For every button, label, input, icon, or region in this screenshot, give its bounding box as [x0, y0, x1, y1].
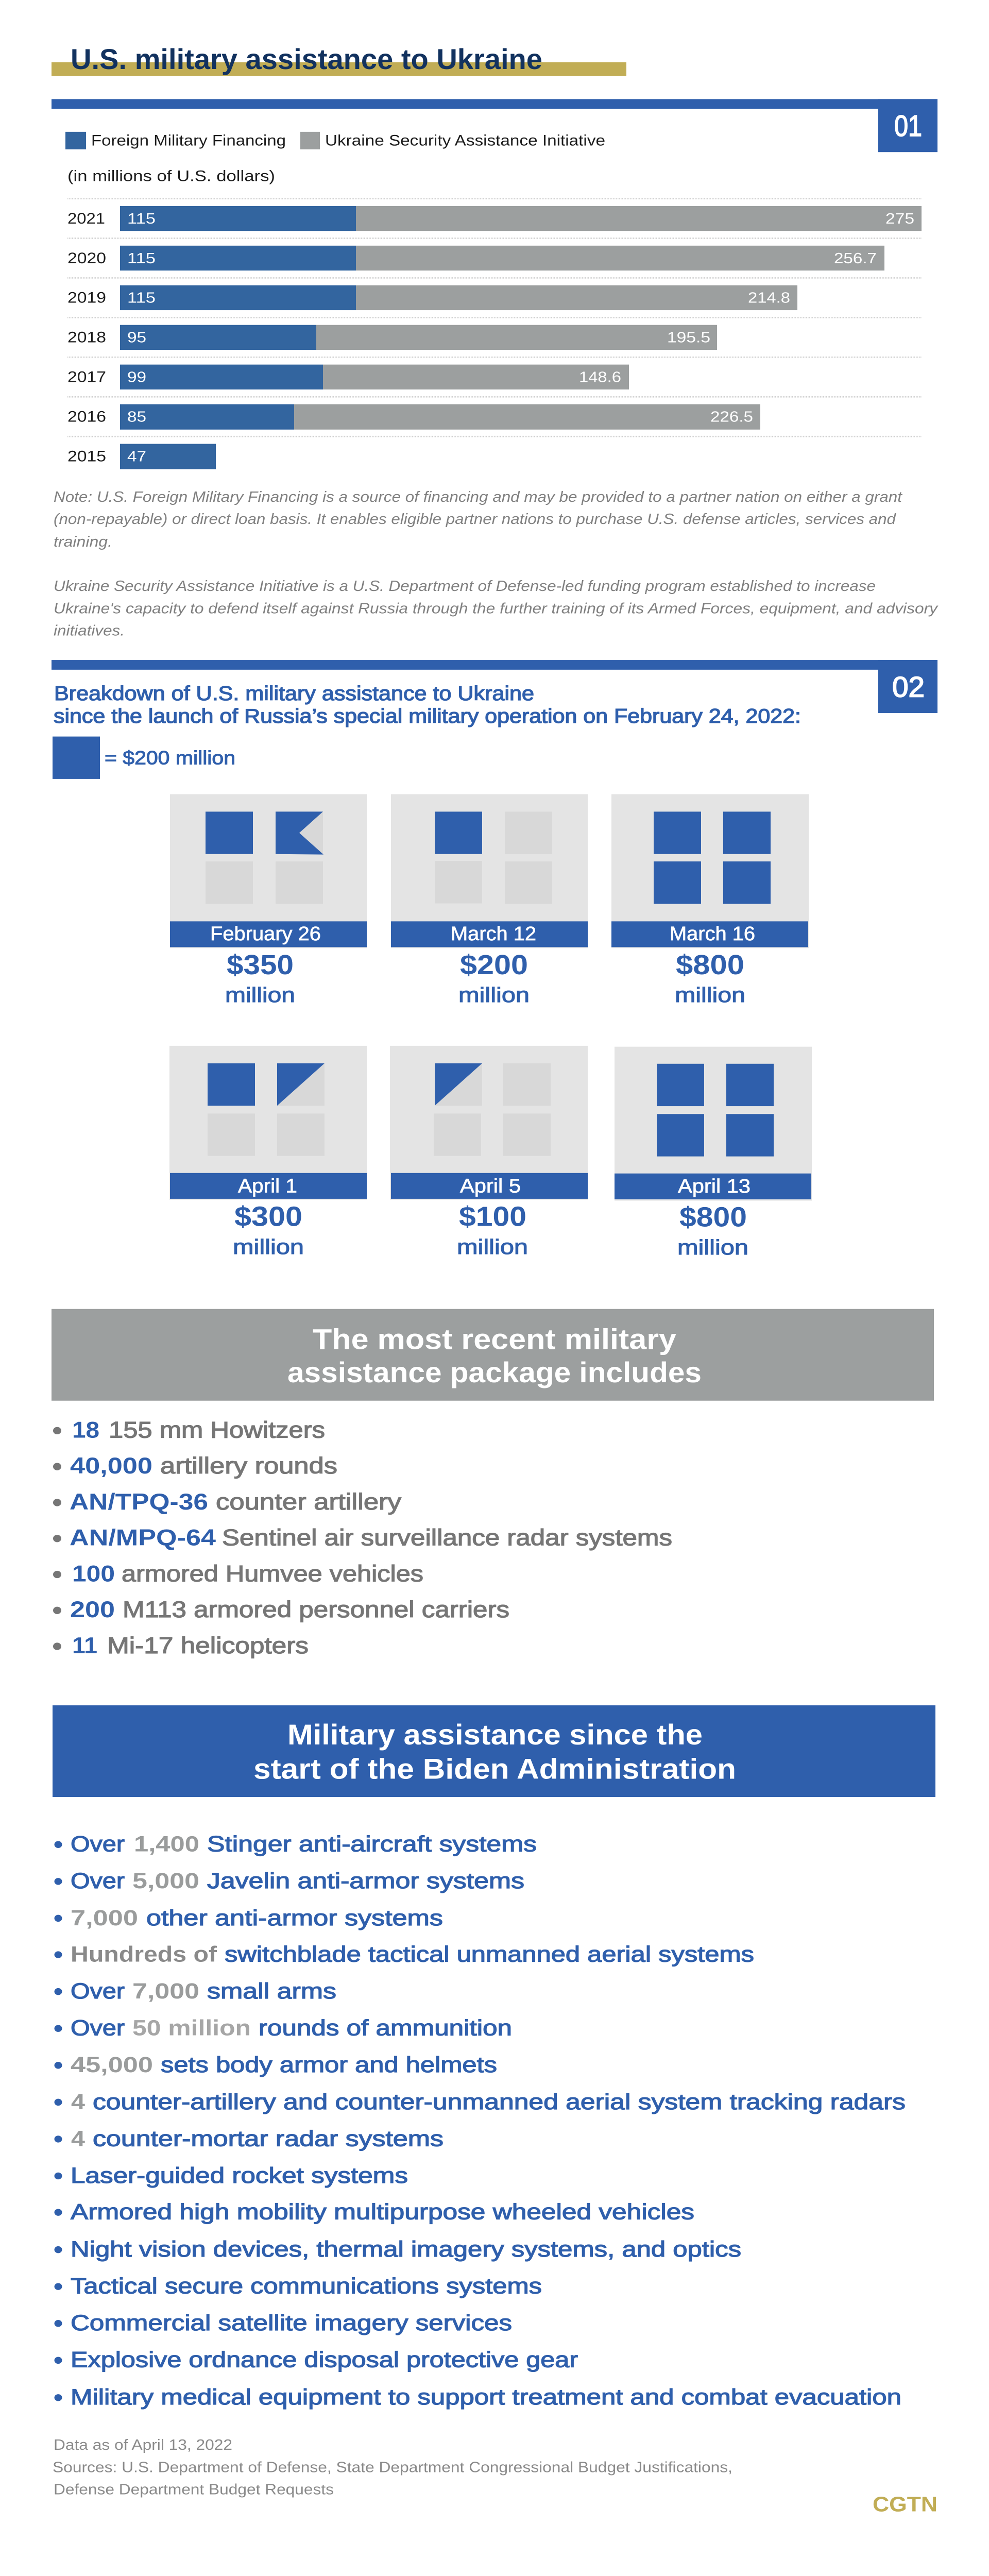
list: since the start of the Biden Administration: Hundreds of: [71, 1942, 217, 1967]
banner: most recent package: The most recent military: [313, 1324, 676, 1355]
card: April 1: $300: [234, 1201, 302, 1232]
bar: 2015: [67, 444, 216, 469]
bar: 2017: [67, 365, 629, 389]
note: Foreign Military Financing: (non-repayable) or direct loan basis. It enables eligible partner nations to purchase U.S. defense articles, services and: [54, 512, 896, 528]
chart legend: [65, 132, 605, 149]
bar: 2018: 95: [127, 330, 146, 346]
bar: 2015: 2015: [67, 448, 106, 465]
bar: 2017: 99: [127, 369, 146, 385]
bar: 2017: 2017: [67, 368, 106, 385]
title: U.S. military assistance to Ukraine: [71, 44, 542, 75]
list: since the start of the Biden Administration: Armored high mobility multipurpose wheeled vehicles: [71, 2199, 694, 2224]
list: since the start of the Biden Administration: other anti-armor systems: [146, 1905, 443, 1930]
list: since the start of the Biden Administration: Over: [71, 1832, 125, 1856]
section 01 header: 01: [894, 109, 922, 142]
bar: 2019: 115: [127, 290, 156, 306]
bar: 2021: [67, 206, 922, 231]
note: Foreign Military Financing: training.: [54, 534, 112, 550]
bar: 2017: 148.6: [579, 369, 621, 385]
card: March 16: March 16: [670, 923, 755, 944]
card: April 13: $800: [679, 1201, 747, 1233]
breakdown heading: [54, 682, 801, 727]
list: since the start of the Biden Administration: counter-artillery and counter-unmanned aerial system tracking radars: [93, 2089, 906, 2114]
breakdown heading: since the launch of Russia’s special military operation on February 24, 2022:: [54, 704, 801, 727]
card: April 5: million: [457, 1235, 528, 1259]
bar: 2015: 47: [127, 449, 146, 465]
note: Foreign Military Financing: [54, 489, 903, 550]
bar: 2016: [67, 404, 760, 430]
list: since the start of the Biden Administration: Night vision devices, thermal imagery systems, and optics: [71, 2236, 741, 2261]
banner: since the start of the Biden Administration: [53, 1705, 935, 1797]
banner: since the start of the Biden Administration: start of the Biden Administration: [253, 1753, 736, 1785]
list: since the start of the Biden Administration: 4: [71, 2126, 86, 2151]
card: February 26: million: [225, 983, 295, 1007]
note: Ukraine Security Assistance Initiative: [54, 578, 939, 639]
bar: 2016: 2016: [67, 408, 106, 425]
list: since the start of the Biden Administration: Tactical secure communications systems: [71, 2274, 542, 2298]
bar: 2020: [67, 246, 884, 270]
bar: 2020: 256.7: [834, 250, 877, 266]
note: Ukraine Security Assistance Initiative: initiatives.: [54, 623, 125, 639]
card: April 1: April 1: [238, 1175, 297, 1197]
bar: 2016: 85: [127, 409, 146, 425]
list: most recent package: AN/TPQ-36: [70, 1489, 208, 1515]
bar: 2018: 2018: [67, 329, 106, 346]
card: April 1: [169, 1046, 367, 1259]
unit legend: = $200 million: [105, 748, 235, 769]
list: most recent package: armored Humvee vehicles: [122, 1561, 423, 1587]
unit legend: [53, 737, 235, 779]
card: April 1: million: [233, 1235, 304, 1259]
list: since the start of the Biden Administration: 5,000: [132, 1869, 199, 1893]
chart unit note: (in millions of U.S. dollars): [67, 167, 275, 184]
bar: 2016: 226.5: [710, 409, 753, 425]
bar: 2018: 195.5: [667, 330, 710, 346]
list: since the start of the Biden Administration: Over: [71, 2015, 125, 2040]
list: most recent package: counter artillery: [216, 1489, 401, 1515]
list: since the start of the Biden Administration: rounds of ammunition: [259, 2015, 512, 2040]
card: March 12: [391, 794, 588, 1007]
card: February 26: February 26: [210, 923, 321, 944]
section 02 header: 02: [892, 672, 925, 703]
list: since the start of the Biden Administration: Laser-guided rocket systems: [71, 2163, 408, 2188]
list: since the start of the Biden Administration: 7,000: [71, 1905, 138, 1930]
list: since the start of the Biden Administration: 1,400: [134, 1832, 199, 1856]
list: most recent package: 200: [70, 1597, 115, 1623]
list: most recent package: artillery rounds: [160, 1453, 337, 1479]
section 02 header: [52, 660, 937, 713]
logo: CGTN: CGTN: [873, 2493, 937, 2516]
card: March 12: $200: [460, 950, 528, 980]
card: March 12: March 12: [451, 923, 536, 944]
list: since the start of the Biden Administration: Commercial satellite imagery services: [71, 2311, 512, 2335]
bar: 2020: 2020: [67, 249, 106, 266]
note: Ukraine Security Assistance Initiative: Ukraine Security Assistance Initiative is a U.S. Department of Defense-led funding program established to increase: [54, 578, 876, 594]
list: most recent package: Mi-17 helicopters: [107, 1633, 309, 1658]
list: since the start of the Biden Administration: Javelin anti-armor systems: [207, 1869, 524, 1893]
list: since the start of the Biden Administration: Military medical equipment to support treatment and combat evacuation: [71, 2385, 901, 2410]
card: February 26: [170, 794, 367, 1007]
bar: 2019: 2019: [67, 289, 106, 306]
card: April 5: $100: [459, 1201, 526, 1232]
card: March 12: million: [458, 983, 530, 1007]
card: April 5: April 5: [460, 1175, 521, 1197]
card: March 16: million: [675, 983, 745, 1007]
list: most recent package: M113 armored personnel carriers: [123, 1597, 509, 1623]
breakdown heading: Breakdown of U.S. military assistance to Ukraine: [54, 682, 534, 704]
list: since the start of the Biden Administration: 50 million: [132, 2015, 251, 2040]
card: April 13: [615, 1047, 812, 1260]
sources: [53, 2437, 732, 2498]
list: since the start of the Biden Administration: sets body armor and helmets: [161, 2053, 497, 2077]
list: most recent package: Sentinel air surveillance radar systems: [222, 1525, 672, 1551]
banner: since the start of the Biden Administration: Military assistance since the: [287, 1719, 703, 1751]
note: Foreign Military Financing: Note: U.S. Foreign Military Financing is a source of financing and may be provided to a partner nation on either a grant: [54, 489, 903, 505]
bar: 2020: 115: [127, 250, 156, 266]
list: since the start of the Biden Administration: switchblade tactical unmanned aerial systems: [225, 1942, 754, 1967]
card: March 16: [611, 794, 809, 1007]
list: since the start of the Biden Administration: counter-mortar radar systems: [93, 2126, 444, 2151]
chart legend: Foreign Military Financing: [91, 132, 286, 149]
section 01 header: [52, 99, 937, 152]
note: Ukraine Security Assistance Initiative: Ukraine's capacity to defend itself against Russia through the further training of its Armed Forces, equipment, and advisory: [54, 601, 939, 617]
list: most recent package: 100: [72, 1561, 115, 1587]
list: since the start of the Biden Administration: [55, 1832, 906, 2410]
list: since the start of the Biden Administration: Over: [71, 1869, 125, 1893]
card: February 26: $350: [227, 950, 294, 980]
sources: Data as of April 13, 2022: [54, 2437, 232, 2453]
card: April 5: [390, 1046, 588, 1259]
list: since the start of the Biden Administration: 7,000: [132, 1978, 199, 2003]
list: most recent package: 11: [72, 1633, 97, 1658]
stacked bar chart: [67, 199, 922, 469]
list: since the start of the Biden Administration: Over: [71, 1978, 125, 2003]
list: most recent package: 18: [72, 1417, 99, 1443]
bar: 2021: 275: [885, 211, 914, 227]
card: March 16: $800: [676, 950, 744, 980]
list: most recent package: AN/MPQ-64: [70, 1525, 216, 1551]
list: since the start of the Biden Administration: Explosive ordnance disposal protective gear: [71, 2347, 578, 2372]
list: since the start of the Biden Administration: Stinger anti-aircraft systems: [207, 1832, 537, 1856]
list: most recent package: [53, 1417, 672, 1658]
list: since the start of the Biden Administration: 4: [71, 2089, 86, 2114]
bar: 2021: 115: [127, 211, 156, 227]
card: April 13: million: [677, 1235, 748, 1260]
bar: 2018: [67, 325, 717, 350]
list: since the start of the Biden Administration: 45,000: [71, 2053, 153, 2077]
card: April 13: April 13: [678, 1176, 751, 1197]
sources: Sources: U.S. Department of Defense, State Department Congressional Budget Justifications,: [53, 2460, 732, 2476]
sources: Defense Department Budget Requests: [54, 2482, 334, 2498]
banner: most recent package: [52, 1309, 934, 1401]
list: most recent package: 40,000: [70, 1453, 152, 1479]
banner: most recent package: assistance package includes: [287, 1357, 702, 1388]
bar: 2021: 2021: [67, 210, 105, 227]
bar: 2019: [67, 285, 797, 310]
list: most recent package: 155 mm Howitzers: [109, 1417, 325, 1443]
bar: 2019: 214.8: [748, 290, 790, 306]
list: since the start of the Biden Administration: small arms: [207, 1978, 336, 2003]
chart legend: Ukraine Security Assistance Initiative: [325, 132, 605, 149]
